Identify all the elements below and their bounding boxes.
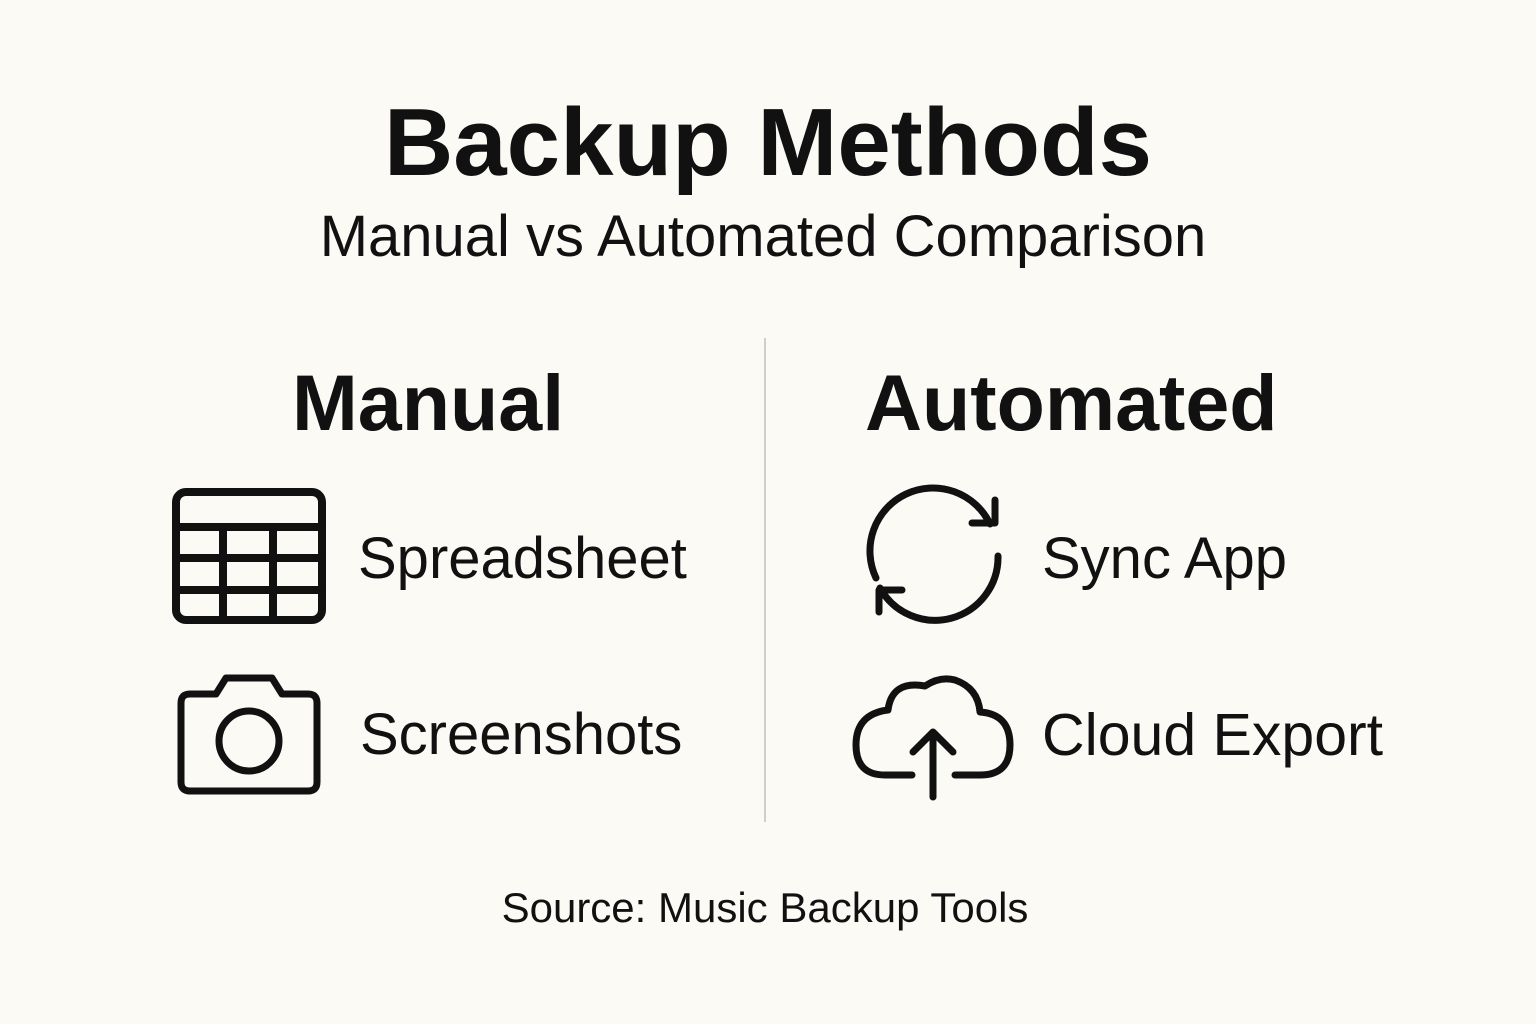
divider bbox=[764, 338, 766, 822]
label: Screenshots: Screenshots bbox=[360, 702, 682, 767]
subtitle: Manual vs Automated Comparison bbox=[320, 204, 1206, 269]
label: Cloud Export: Cloud Export bbox=[1042, 702, 1383, 768]
heading: Automated: Automated bbox=[865, 358, 1278, 447]
source: Source: Music Backup Tools bbox=[502, 884, 1028, 931]
title: Backup Methods bbox=[384, 89, 1152, 196]
label: Sync App: Sync App bbox=[1042, 526, 1287, 591]
heading: Manual: Manual bbox=[292, 358, 564, 447]
label: Spreadsheet: Spreadsheet bbox=[358, 526, 687, 591]
